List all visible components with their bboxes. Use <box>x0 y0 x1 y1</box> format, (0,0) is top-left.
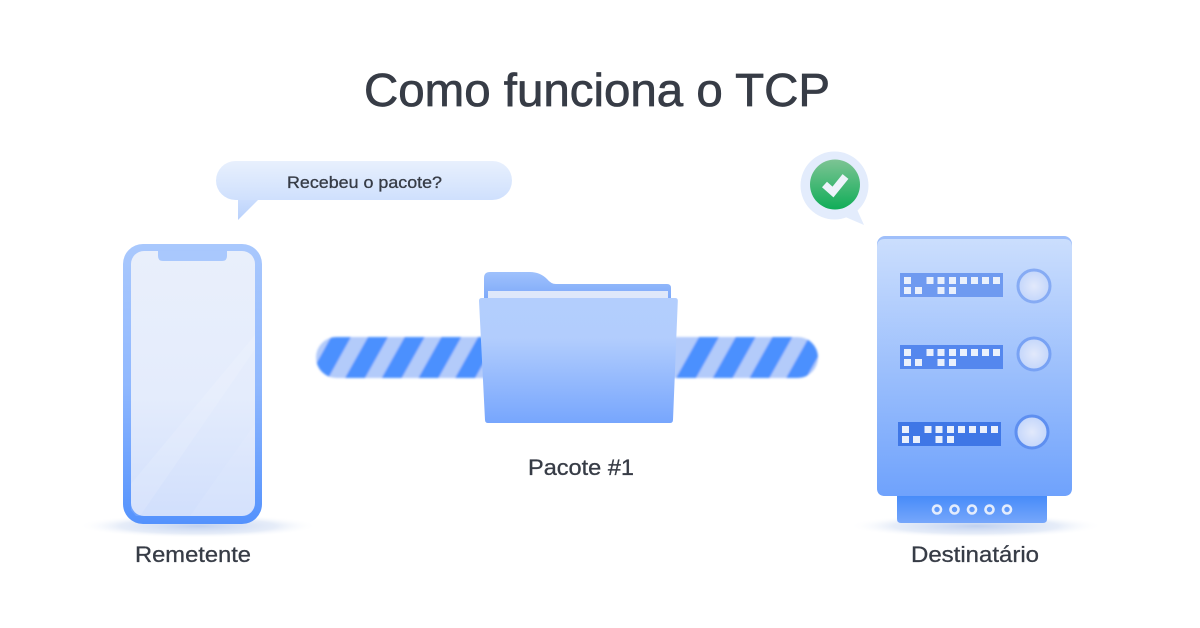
icon: smartphone (sender) <box>123 244 262 524</box>
title: Como funciona o TCP <box>364 64 830 116</box>
server row 3 <box>898 416 1048 448</box>
server base with five ports <box>897 496 1047 523</box>
status bubble with green check <box>800 152 868 225</box>
server row 1 <box>900 270 1050 302</box>
label: Pacote #1: Pacote #1 <box>528 455 634 480</box>
receiver ground shadow <box>849 514 1103 538</box>
icon: check mark <box>824 176 846 192</box>
server row 2 <box>900 338 1050 370</box>
progress bar: striped transfer tube <box>308 337 829 378</box>
label: Destinatário: Destinatário <box>911 542 1039 567</box>
sender ground shadow <box>78 514 318 538</box>
bubble text: Recebeu o pacote? <box>287 174 442 192</box>
server cabinet <box>877 236 1072 496</box>
label: Remetente: Remetente <box>135 542 251 567</box>
speech bubble: Recebeu o pacote? <box>216 161 512 220</box>
icon: server (receiver) <box>877 236 1072 523</box>
icon: folder (packet) <box>479 272 678 423</box>
